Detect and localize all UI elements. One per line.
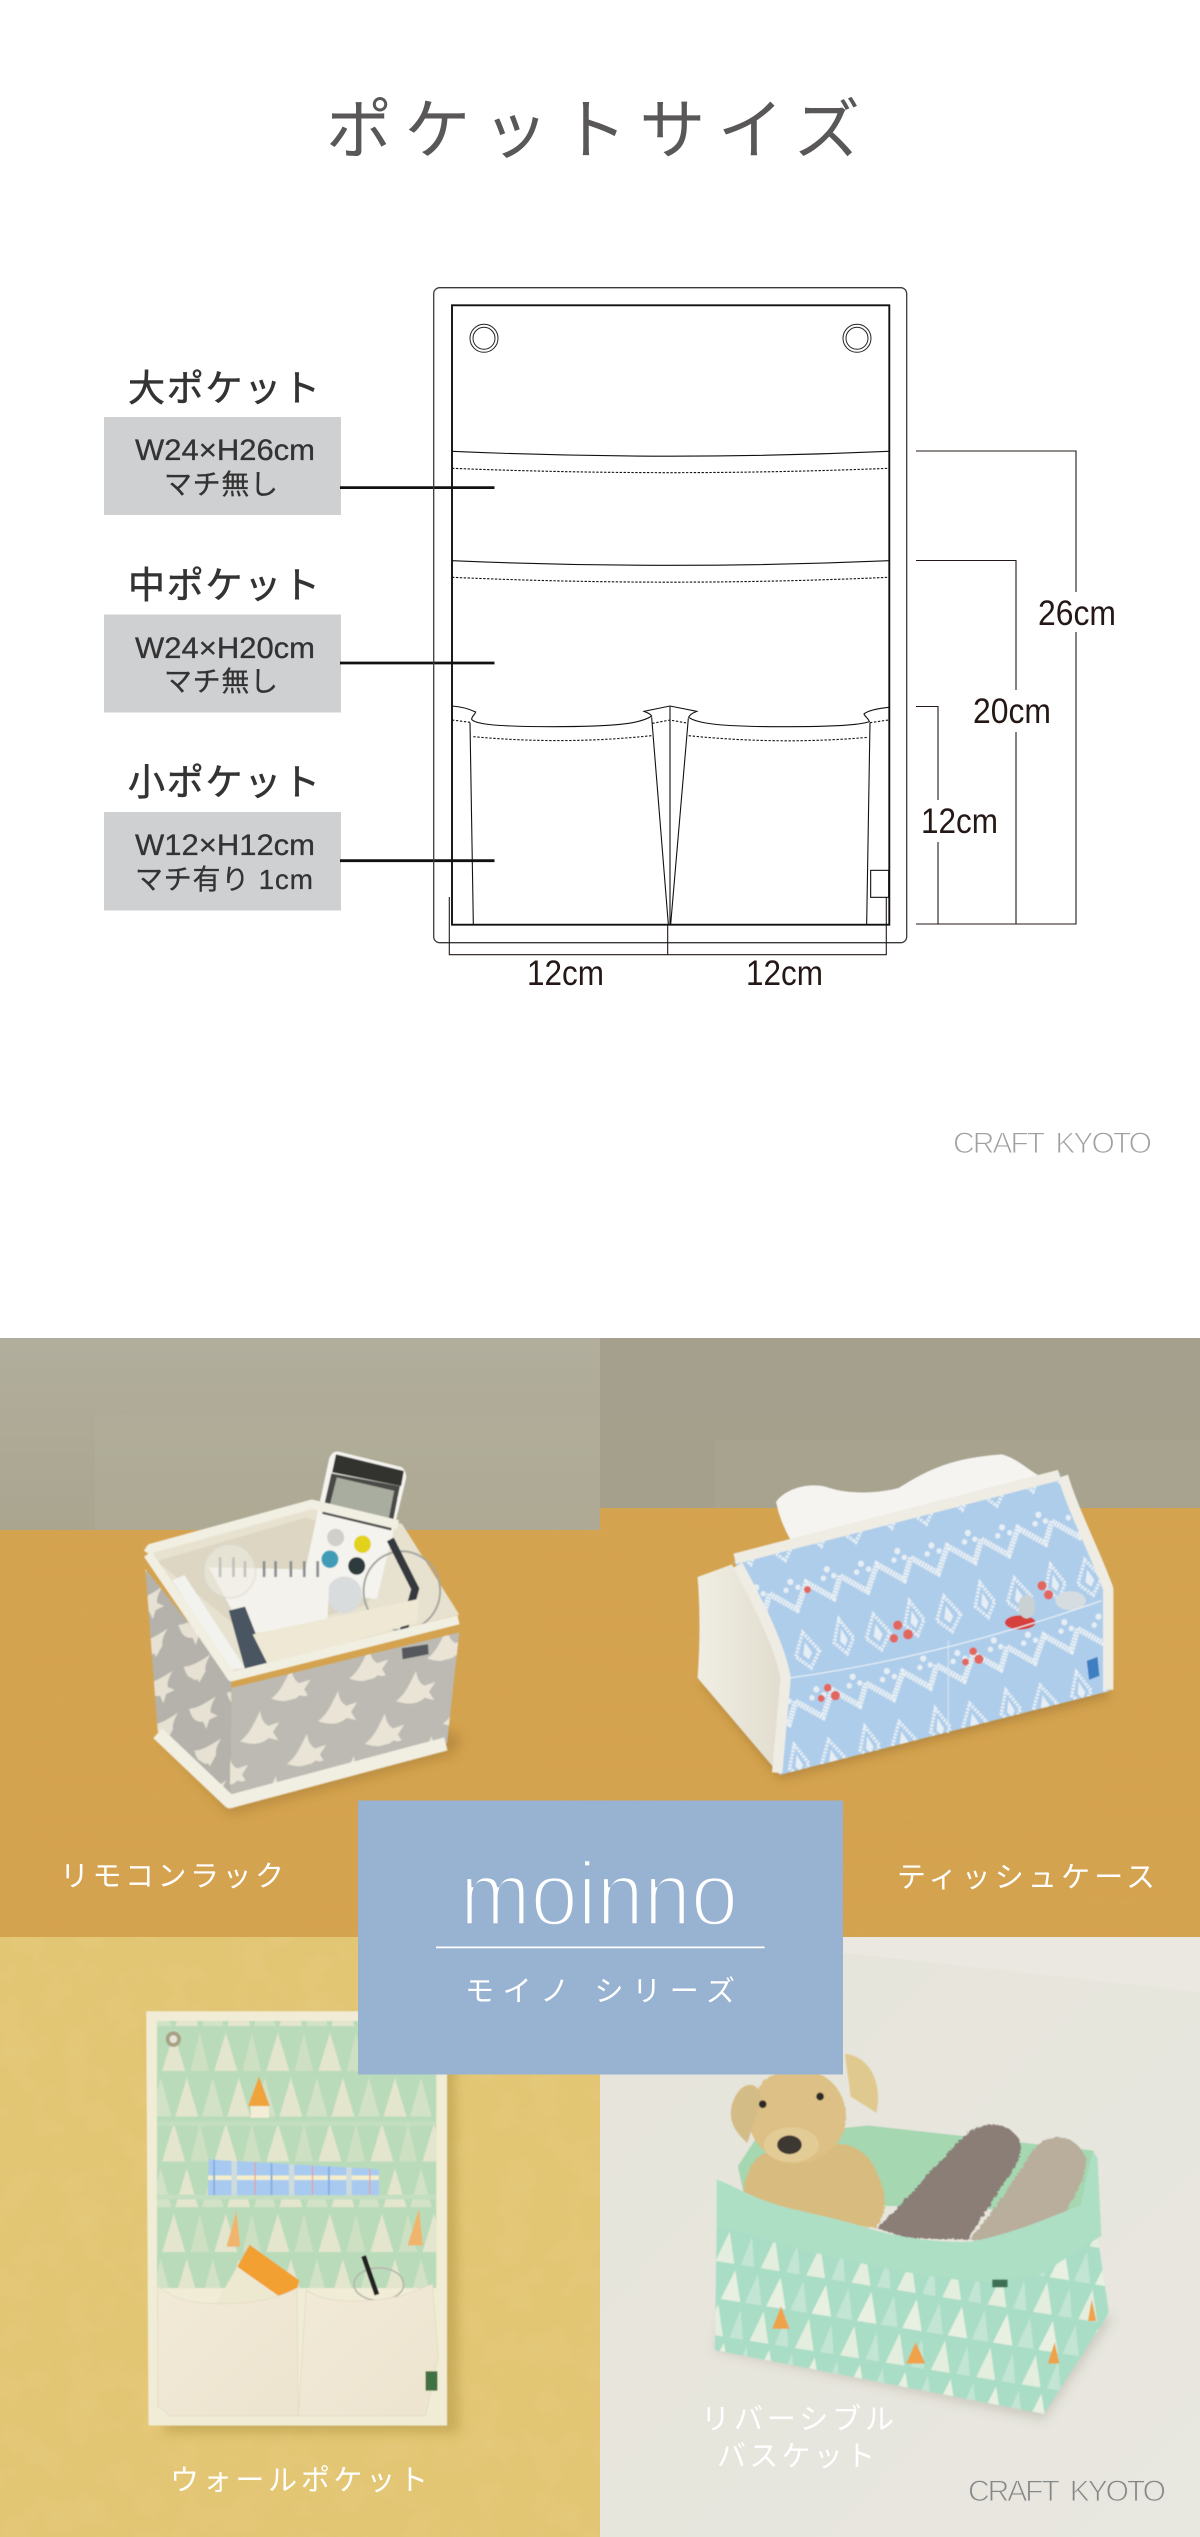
photo: remote rack [0,1338,600,1938]
wall pocket shadow [153,2019,459,2433]
dimension: small pocket height: 12cm [921,802,998,841]
series name: モイノ シリーズ [465,1975,735,2008]
dimension: medium pocket height: 20cm [973,692,1051,731]
caption: reversible basket: リバーシブル [701,2403,894,2436]
tag [1087,1657,1099,1680]
tag [992,2280,1008,2287]
divider [436,1946,764,1948]
spec box: large pocket: マチ無し [164,469,278,500]
glasses [354,2256,404,2300]
dimension: large pocket height [916,451,1116,924]
plush dog [731,2054,885,2228]
spec box: medium pocket: W24×H20cm [135,632,315,665]
remote control [300,1451,406,1613]
face binding [735,1475,1108,1773]
heading: small pocket: 小ポケット [128,762,320,803]
divider [253,1599,419,1665]
pocket fold lines [157,2124,436,2197]
photo: wall pocket [0,1937,600,2537]
outer edge [434,288,907,943]
caption: reversible basket: バスケット [717,2441,875,2473]
front face [230,1632,459,1798]
logo wordmark: moinno [460,1845,738,1945]
small book [215,2245,299,2306]
orange house [248,2076,270,2118]
dimension: medium pocket height [916,560,1052,924]
spec box: small pocket: W12×H12cm [135,829,315,862]
orange houses [772,2300,1096,2364]
caption: remote rack: リモコンラック [60,1861,284,1893]
large pocket edge [452,451,889,473]
pen [172,1575,245,1670]
leader line: small pocket [340,859,494,862]
green tag [426,2371,437,2391]
tag [402,1644,429,1659]
glasses [364,1539,440,1630]
brand mark: lower: CRAFT KYOTO [968,2475,1166,2508]
blue face [734,1472,1111,1775]
basket interior [738,2125,1094,2213]
leader line: large pocket [340,486,494,489]
magnifier [204,1544,256,1598]
left face [145,1569,232,1800]
eyelet [166,2031,181,2047]
beige towel [969,2137,1086,2244]
notebook [209,1557,330,1634]
case shadow [700,1676,1111,1779]
caption: wall pocket: ウォールポケット [170,2464,428,2497]
spec box: small pocket: マチ有り 1cm [135,864,313,895]
photo: tissue case [600,1338,1200,1938]
spec box: small pocket [104,812,341,910]
caption: reversible basket [701,2403,894,2473]
cream frame [146,2011,447,2425]
panel: small pocket label [104,762,494,910]
spec box: medium pocket: マチ無し [164,666,278,697]
basket shadow [715,2317,1113,2420]
pocket seam [947,1640,950,1733]
bottom trim [158,1733,446,1802]
basket body [715,2226,1109,2414]
eyelet right [843,324,871,352]
photo: reversible basket [600,1937,1200,2537]
basket cuff [717,2151,1101,2283]
green panel [157,2021,436,2288]
leader line: medium pocket [340,662,494,664]
plaid book [208,2160,379,2195]
spec box: large pocket [104,417,341,515]
spec box: large pocket: W24×H26cm [135,434,315,467]
red flowers [804,1581,1053,1702]
heading: large pocket: 大ポケット [128,368,320,409]
dimension label: right width: 12cm [746,954,823,993]
inner panel [452,305,889,925]
grey towel [877,2124,1021,2240]
pocket edge [791,1601,1101,1678]
dimension: large pocket height: 26cm [1038,594,1116,633]
left pocket [158,2286,299,2416]
tissue [776,1454,1052,1541]
rack interior [147,1504,459,1672]
right pocket [299,2284,438,2416]
panel: medium pocket label [104,565,494,712]
clip [229,1607,268,1669]
dimension label: left width: 12cm [527,954,604,993]
panel: moinno logo block [358,1800,843,2074]
brand mark: upper: CRAFT KYOTO [953,1127,1152,1160]
diagram: wall pocket outline [434,288,907,943]
candies [1005,1591,1086,1630]
orange tree accents [227,2209,423,2247]
rack back mesh [157,1518,387,1636]
dimension: width brackets [449,897,886,955]
panel: large pocket label [104,368,494,515]
caption: tissue case: ティッシュケース [897,1862,1155,1894]
medium pocket edge [452,561,889,582]
title: ポケットサイズ [326,93,860,167]
rack shadow [161,1715,463,1814]
small pockets [452,706,889,924]
eyelet left [470,324,498,352]
side panel [698,1564,790,1775]
dimension: small pocket height [916,706,1000,924]
heading: medium pocket: 中ポケット [128,565,320,606]
spec box: medium pocket [104,614,341,712]
rim [148,1504,458,1677]
